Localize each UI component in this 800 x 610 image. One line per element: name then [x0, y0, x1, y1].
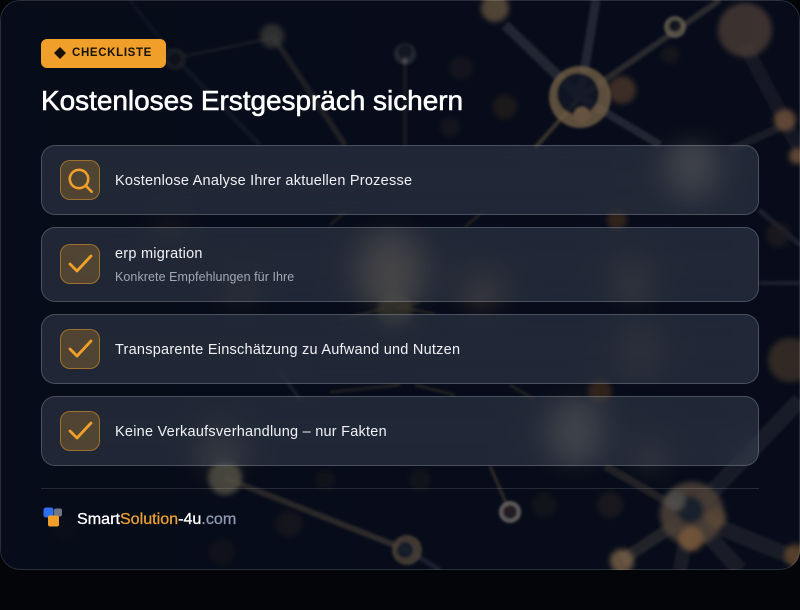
node: large amber sphere: [549, 66, 611, 128]
checklist item 3: [41, 314, 759, 384]
node: ring lower centre: [392, 535, 422, 565]
icon: check mark: [60, 411, 100, 451]
title: Kostenloses Erstgespräch sichern: [41, 85, 463, 116]
checklist item 4: [41, 396, 759, 466]
icon: check mark: [60, 244, 100, 284]
badge: CHECKLISTE: CHECKLISTE: [72, 47, 152, 59]
item text: Keine Verkaufsverhandlung – nur Fakten: [115, 424, 387, 440]
brand name: SmartSolution-4u.com: [77, 510, 236, 528]
icon: magnifying glass: [60, 160, 100, 200]
checklist item 2: [41, 227, 759, 302]
node: dark sphere by badge: [164, 48, 186, 70]
node: bokeh lower right: [660, 482, 726, 551]
item heading: erp migration: [115, 246, 203, 262]
badge: CHECKLISTE: [41, 39, 166, 68]
star burst under cards: [330, 212, 535, 400]
checklist item 1: [41, 145, 759, 215]
node: small ring top right: [664, 16, 686, 38]
item text: Kostenlose Analyse Ihrer aktuellen Prozesse: [115, 173, 412, 189]
node: crystal sphere: [499, 501, 521, 523]
node: dark sphere: [394, 43, 416, 65]
icon: check mark: [60, 329, 100, 369]
item subtext: Konkrete Empfehlungen für Ihre: [115, 270, 294, 284]
glows beneath frosted cards: [152, 146, 716, 474]
node: glowing bokeh lower left: [208, 461, 242, 495]
icon: logo squares: [44, 508, 62, 526]
icon: diamond: [54, 47, 66, 59]
item text: Transparente Einschätzung zu Aufwand und Nutzen: [115, 342, 460, 358]
